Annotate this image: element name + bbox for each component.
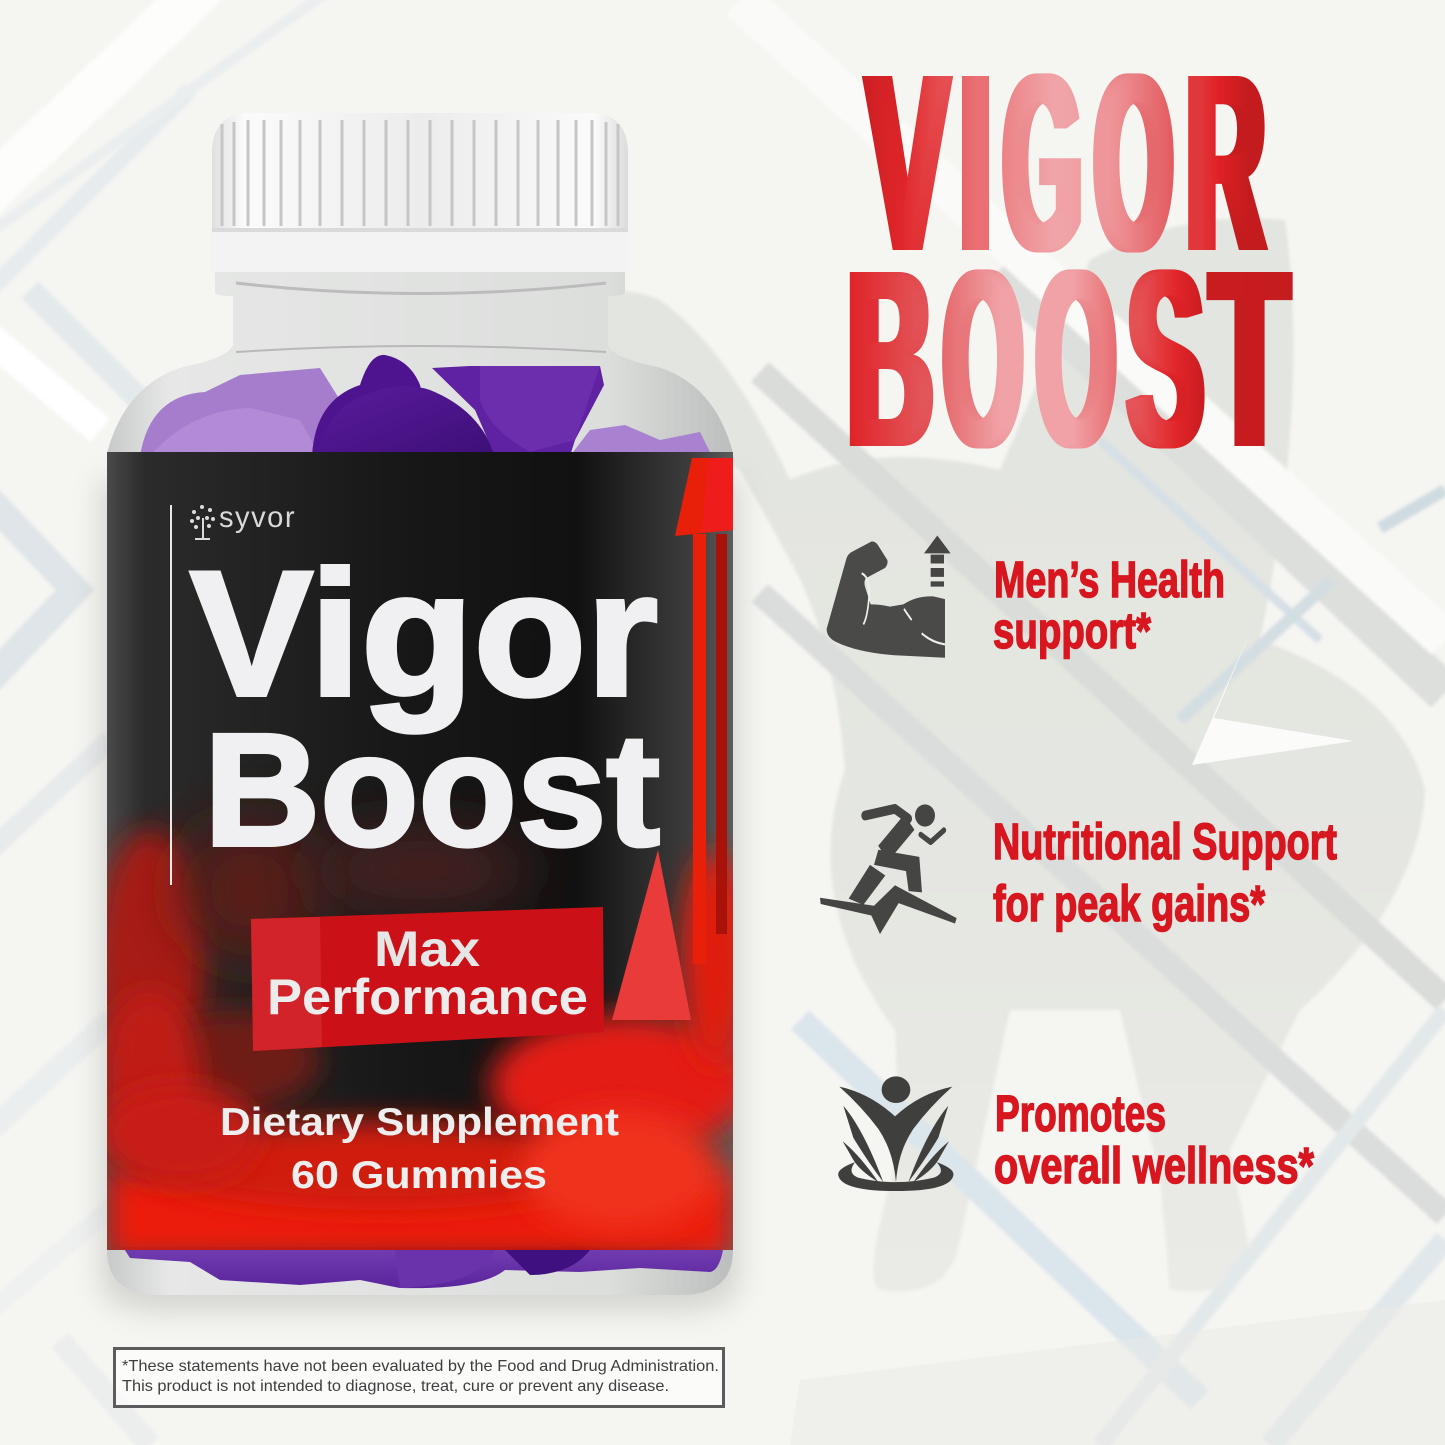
icon: tree — [190, 505, 215, 540]
bottle cap — [211, 113, 628, 275]
bottle glass body — [107, 272, 733, 1295]
bottle shadow — [100, 480, 740, 1312]
label product name — [188, 564, 660, 849]
brand logo — [190, 505, 294, 540]
infographic canvas: T — [1211, 217, 1288, 500]
benefit text: for peak gains* — [993, 875, 1265, 932]
icon: flexed arm with up arrow — [827, 536, 951, 658]
benefit: overall wellness — [838, 1076, 1314, 1194]
headline: R — [1187, 21, 1264, 304]
benefit text: support* — [993, 602, 1151, 659]
headline: O — [1037, 217, 1115, 500]
label product name: Boost — [204, 700, 660, 879]
label descriptor: Dietary Supplement — [220, 1101, 619, 1144]
benefit text: Promotes — [995, 1085, 1166, 1142]
product bottle — [95, 113, 750, 1312]
label badge: Max Performance — [251, 907, 604, 1051]
benefit text: overall wellness* — [994, 1137, 1314, 1194]
FDA disclaimer — [114, 1348, 724, 1406]
headline: O — [944, 217, 1022, 500]
headline: G — [1004, 21, 1081, 304]
gummies top — [140, 355, 712, 456]
benefit text: Nutritional Support — [993, 813, 1337, 870]
product label — [95, 452, 750, 1260]
icon: wellness figure — [838, 1076, 953, 1191]
icon: runner — [820, 804, 957, 934]
label descriptor: 60 Gummies — [291, 1154, 547, 1197]
divider line — [170, 505, 172, 885]
benefit text: Men’s Health — [994, 551, 1225, 608]
label badge: Max Performance: Performance — [267, 969, 588, 1025]
headline: I — [961, 21, 990, 304]
FDA disclaimer: This product is not intended to diagnose, treat, cure or prevent any disease. — [122, 1378, 669, 1395]
benefit text — [993, 813, 1337, 932]
benefit: nutritional support — [820, 804, 1337, 934]
red smoke — [95, 820, 750, 1260]
headline: O — [1095, 21, 1172, 304]
brand logo: syvor — [219, 501, 296, 534]
athlete silhouette — [530, 0, 1445, 1445]
label product name: Vigor — [190, 534, 658, 733]
benefit text — [994, 1085, 1314, 1194]
red arrows — [612, 458, 733, 1020]
label descriptor — [222, 1106, 618, 1188]
label badge: Max Performance: Max — [374, 921, 480, 977]
gummies bottom — [115, 1235, 725, 1288]
headline — [848, 21, 1288, 500]
headline: S — [1128, 217, 1203, 500]
FDA disclaimer: *These statements have not been evaluated by the Food and Drug Administration. — [122, 1358, 719, 1375]
headline: B — [848, 217, 932, 500]
headline: V — [867, 21, 948, 304]
benefit text — [993, 551, 1225, 659]
benefit: men's health — [827, 536, 1225, 659]
